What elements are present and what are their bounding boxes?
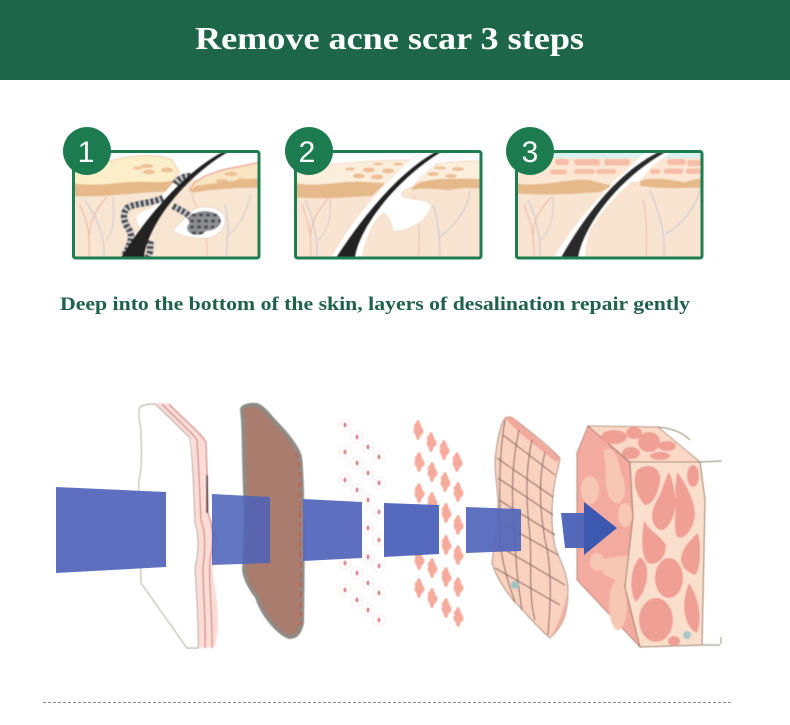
layer: cell dots (339, 419, 385, 626)
layer: blue band 4 (384, 503, 439, 557)
layer: blue band 1 (56, 487, 166, 573)
arrow (561, 502, 617, 555)
step badge 1 (63, 127, 111, 175)
step badge 2: 2 (299, 136, 315, 169)
diagram: skin layers penetration (56, 403, 722, 648)
panel: step 1 skin with acne (63, 127, 260, 259)
layer: pink cells (414, 420, 464, 627)
caption text: Deep into the bottom of the skin, layers of desalination repair gently (60, 294, 691, 315)
step badge 3: 3 (522, 136, 538, 169)
layer: fatty tissue block (577, 426, 722, 647)
layer: mesh slab (492, 417, 568, 638)
layer: blue band 5 (466, 507, 521, 553)
step badge 2 (285, 127, 333, 175)
layer: blue band 3 (303, 499, 362, 561)
title: Remove acne scar 3 steps (195, 20, 584, 56)
layer: epidermis slab (139, 403, 218, 648)
layer: dermis brown slab (242, 405, 303, 637)
panel: step 3 skin restored (506, 127, 703, 259)
header banner (0, 0, 790, 80)
step badge 3 (506, 127, 554, 175)
panel: step 2 pore cleared (285, 127, 482, 259)
layer: blue band 2 (212, 494, 270, 565)
step badge 1: 1 (78, 136, 94, 169)
